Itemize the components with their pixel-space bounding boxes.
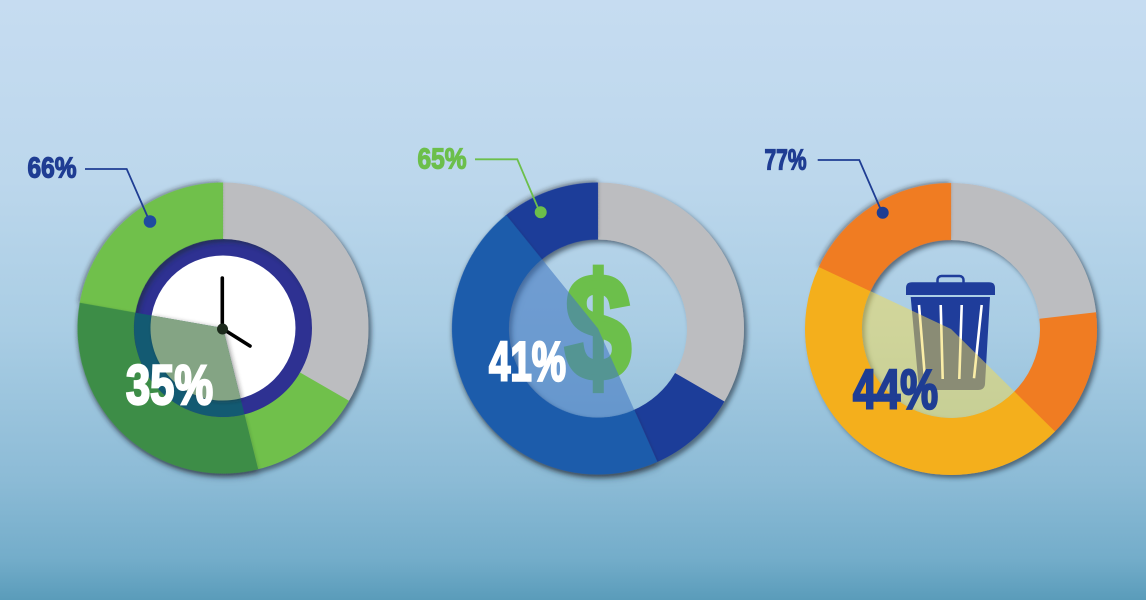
- callout: 66%: [28, 152, 156, 228]
- donut ring: money: [433, 163, 763, 494]
- value: 44%: 44%: [853, 358, 938, 420]
- center overlay wedge: money: [539, 270, 657, 387]
- chart: time donut: [28, 152, 383, 488]
- clock face and hands: [134, 256, 296, 417]
- chart: waste donut: [764, 144, 1117, 495]
- callout: 65%: [418, 144, 547, 218]
- callout: 77%: 77%: [764, 144, 807, 176]
- clock bezel: [133, 238, 313, 418]
- center overlay wedge: waste: [888, 266, 1014, 392]
- callout: 65%: 65%: [418, 144, 467, 176]
- callout: 66%: 66%: [28, 152, 77, 184]
- dollar icon: $: [565, 243, 631, 411]
- trash can icon: [906, 276, 995, 390]
- donut ring: time: [63, 168, 383, 488]
- value: 41%: 41%: [489, 330, 566, 392]
- callout: 77%: [764, 144, 889, 219]
- value: 35%: 35%: [126, 353, 213, 416]
- donut ring: waste: [785, 163, 1117, 495]
- chart: money donut: [418, 144, 763, 494]
